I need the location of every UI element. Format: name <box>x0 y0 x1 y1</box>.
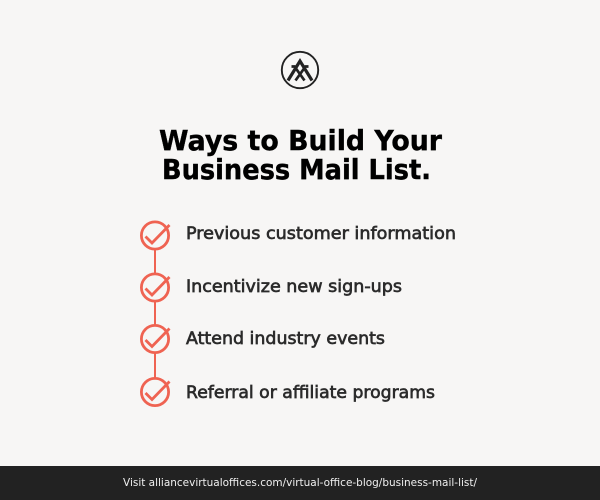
item: incentivize new sign-ups: Incentivize new sign-ups <box>186 277 402 297</box>
item: previous customer information <box>141 222 456 249</box>
item: attend industry events <box>141 325 385 353</box>
title: Business Mail List. <box>162 154 431 186</box>
icon: logo <box>282 52 318 88</box>
item: incentivize new sign-ups <box>141 274 402 301</box>
footer bar: Visit alliancevirtualoffices.com/virtual-office-blog/business-mail-list/ <box>123 477 477 489</box>
title <box>159 125 442 186</box>
item: previous customer information: Previous customer information <box>186 224 456 244</box>
title: Ways to Build Your <box>159 125 442 157</box>
connector lines <box>154 249 156 378</box>
item: referral or affiliate programs <box>141 378 435 406</box>
item: referral or affiliate programs: Referral or affiliate programs <box>186 383 435 403</box>
footer bar <box>0 466 600 500</box>
item: attend industry events: Attend industry events <box>186 329 385 349</box>
checklist <box>141 222 456 406</box>
